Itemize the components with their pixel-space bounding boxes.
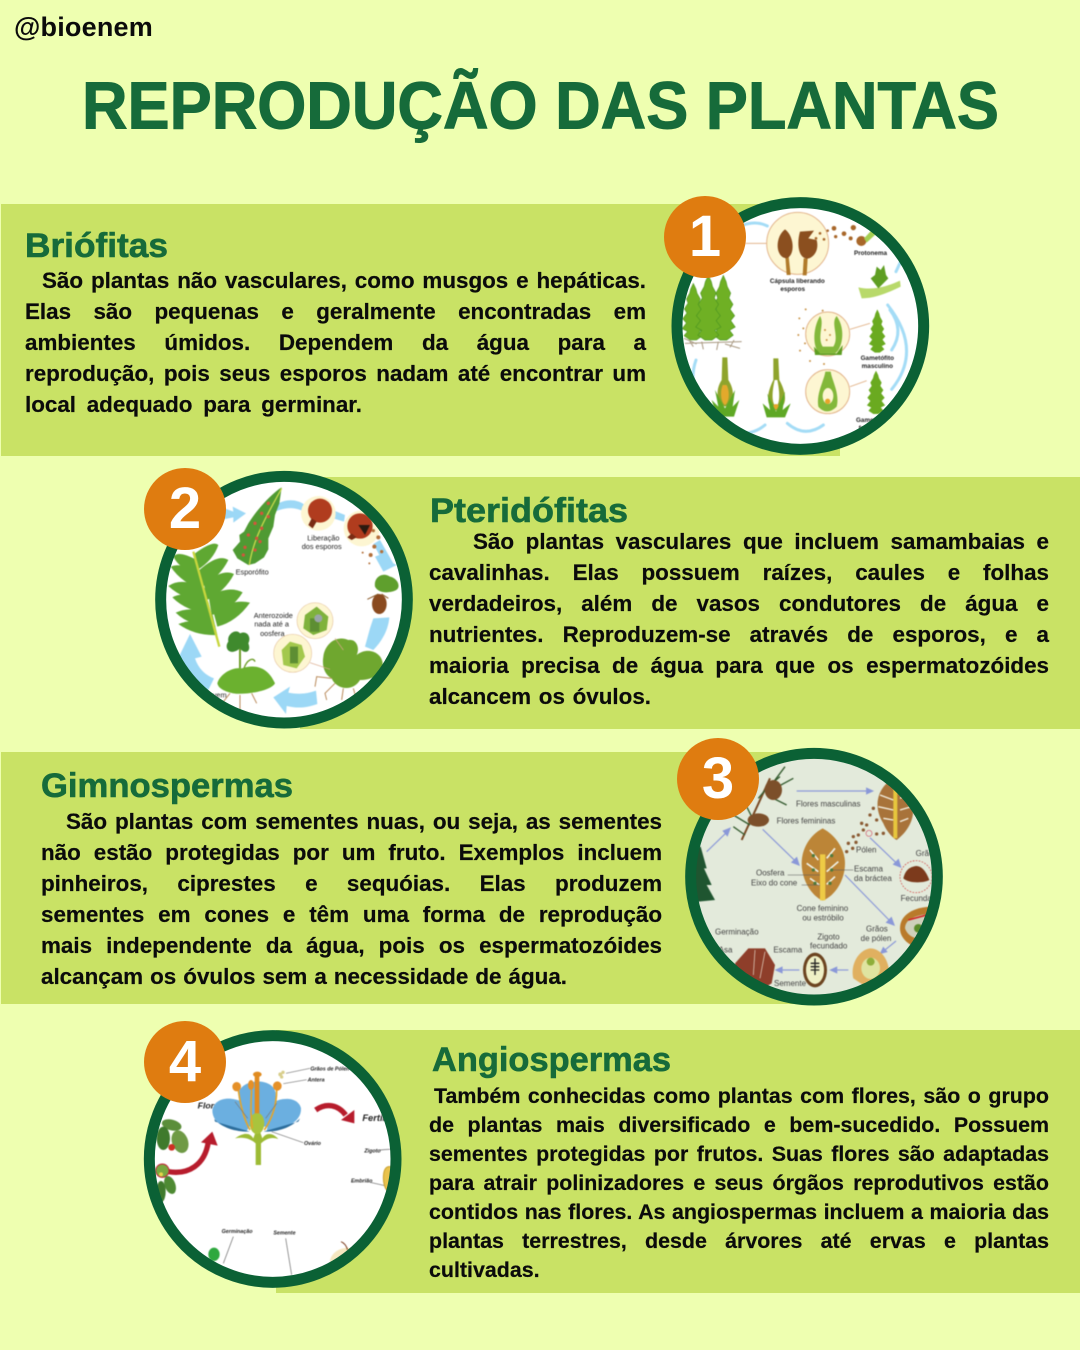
ring [149,1036,396,1282]
label: Liberação dos esporos: dos esporos [302,542,342,551]
text block: Angiospermas: plantas terrestres, desde árvores até ervas e plantas [429,1229,1049,1253]
diagram labels: Grãos [866,925,888,934]
illustration: fern life cycle circle [155,470,413,728]
text block: Angiospermas: sementes protegidas por frutos. Suas flores são adaptadas [429,1142,1049,1166]
diagram labels: Cone feminino [797,904,849,913]
diagram labels [715,800,945,988]
diagram labels: Semente [774,979,807,988]
badge: 4 [144,1021,226,1103]
diagram labels: da bráctea [854,874,892,883]
text block: Pteridófitas: verdadeiros, além de vasos condutores de água e [429,591,1049,616]
flower [212,1068,310,1165]
ring [161,476,407,723]
labels: flower parts: Germinação [222,1229,253,1235]
panel: Gimnospermas [1,752,801,1004]
badge: 1: 1 [689,204,721,269]
red arrow to flower [168,1132,218,1172]
arrows: blue cycle [177,500,397,714]
heading: Gimnospermas: Gimnospermas [41,767,293,805]
text block: Pteridófitas: cavalinhas. Elas possuem raízes, caules e folhas [429,560,1049,585]
text block: Gimnospermas: sementes em cones e têm uma forma de reprodução [41,902,662,927]
label: Gametófito masculino: Gametófito [861,355,894,362]
label: Gametófito masculino [861,355,894,370]
badge: 3 [677,738,759,820]
diagram labels: Grão [916,849,934,858]
red arrow to fertilisation [316,1106,354,1123]
heading: Angiospermas: Angiospermas [432,1041,671,1079]
embryo seed [383,1167,398,1192]
female gametophyte plant [867,371,885,414]
winged seed [735,948,775,988]
fertilization detail [900,861,933,949]
text block: Angiospermas: Também conhecidas como plantas com flores, são o grupo [434,1084,1049,1108]
labels: flower parts: Grãos de Pólen [310,1066,350,1072]
label: Anterozoide nada até a oosfera: nada até a [254,620,290,629]
diagram labels: Escama [773,945,803,954]
moss plant with roots [682,275,742,350]
label: Liberação dos esporos [302,533,342,551]
female gametophyte detail [806,370,867,414]
arrows: water cycle [693,223,907,433]
sporophytes on moss [712,357,791,417]
text block: Briófitas: local adequado para germinar. [25,392,362,417]
diagram labels: Oosfera [756,869,785,878]
seedling and pointer lines [208,1149,393,1275]
pollen dots [845,807,885,853]
labels: flower parts: Antera [307,1078,325,1084]
text block: Gimnospermas: não estão protegidas por um fruto. Exemplos incluem [41,840,662,865]
label: Jovem esporófito (partial): Jovem [205,690,227,699]
fruit [330,1242,378,1282]
ring [677,203,924,449]
text block: Pteridófitas: São plantas vasculares que incluem samambaias e [473,529,1049,554]
ring [691,753,937,1000]
heading: Briófitas: Briófitas [25,227,168,265]
heading: Pteridófitas: Pteridófitas [430,492,628,530]
handle: @bioenem: @bioenem [14,12,153,42]
capsule releasing spores [745,212,877,275]
label: Anterozoide nada até a oosfera: Anterozoide [254,611,293,620]
text block: Angiospermas: de plantas mais diversificado e bem-sucedido. Possuem [429,1113,1049,1137]
blue process arrows [707,788,901,973]
text block: Pteridófitas: nutrientes. Reproduzem-se através de esporos, e a [429,622,1049,647]
diagram labels: fecundado [810,941,848,950]
text block: Gimnospermas: pinheiros, ciprestes e sequóias. Elas produzem [41,871,662,896]
male gametophyte detail [797,308,870,365]
spore capsules [301,496,383,564]
label: Gametófito masculino: masculino [862,363,893,370]
label: Gametófito feminino [856,416,875,428]
text block: Angiospermas: para atrair polinizadores e seus órgãos reprodutivos estão [429,1171,1049,1195]
illustration: moss life cycle circle [672,197,930,455]
label: Liberação dos esporos: Liberação [307,533,339,542]
panel: Angiospermas [276,1030,1080,1293]
label: Fertilização: Fertilização [362,1113,414,1123]
label: Cápsula liberando esporos: esporos [780,286,805,293]
badge: 2 [144,468,226,550]
text block: Briófitas [25,268,646,417]
text block: Briófitas: reprodução, pois seus esporos nadam até encontrar um [25,361,646,386]
gametophyte [310,638,383,700]
label: Anterozoide nada até a oosfera: oosfera [260,629,285,638]
diagram labels: Flores masculinas [796,800,860,809]
text block: Angiospermas: contidos nas flores. As angiospermas incluem a maioria das [429,1200,1049,1224]
illustration: angiosperm life cycle circle [144,1030,402,1288]
labels: flower parts: Embrião [351,1178,373,1184]
panel: Pteridófitas [300,477,1080,729]
fertile frond with sori [233,487,282,565]
text block: Gimnospermas: mais independente da água, pois os espermatozóides [41,933,662,958]
text block: Gimnospermas [41,809,662,989]
diagram labels: Fecundação [901,894,945,903]
diagram labels: de pólen [861,934,891,943]
germinating spore [367,575,399,614]
text block: Gimnospermas: São plantas com sementes nuas, ou seja, as sementes [66,809,662,834]
badge: 4: 4 [169,1029,201,1094]
diagram labels: Zigoto [817,933,840,942]
pine tree [696,846,716,902]
label: Anterozoide nada até a oosfera [254,611,293,638]
text block: Pteridófitas: alcancem os óvulos. [429,684,651,709]
diagram labels: Pólen [856,845,876,854]
illustration: gymnosperm life cycle circle [685,748,943,1006]
badge: 2: 2 [169,476,201,541]
label: Gametófito feminino: feminino [859,425,885,432]
label: Cápsula liberando esporos: Cápsula liberando [770,278,825,285]
diagram labels: Asa [719,946,733,955]
protonema sprout [858,265,901,298]
labels: flower parts [222,1066,381,1236]
text block: Pteridófitas [429,529,1050,709]
large fern frond [168,544,250,647]
diagram labels: Flores femininas [777,817,835,826]
text block: Pteridófitas: maioria precisa de água para que os espermatozóides [429,653,1049,678]
pollen grain and ovule [852,948,890,984]
label: Esporófito: Esporófito [236,567,269,576]
diagram labels: Escama [854,865,883,874]
diagram labels: Germinação [715,928,759,937]
text block: Briófitas: ambientes úmidos. Dependem da água para a [25,330,646,355]
leaves and fruit [156,1117,192,1202]
text block: Briófitas: Elas são pequenas e geralmente encontradas em [25,299,646,324]
male cone [878,777,913,840]
title: REPRODUÇÃO DAS PLANTAS [82,68,999,144]
label: Protonema: Protonema [854,250,888,257]
text block: Gimnospermas: alcançam os óvulos sem a necessidade de água. [41,964,567,989]
text block: Briófitas: São plantas não vasculares, como musgos e hepáticas. [42,268,646,293]
archegonium detail circles [274,603,333,672]
diagram labels: ou estróbilo [802,913,844,922]
young fern on gametophyte [217,631,275,710]
badge: 1 [664,196,746,278]
labels: flower parts: Ovário [304,1141,322,1147]
label: Gametófito feminino: Gametófito [856,417,890,424]
diagram labels: Eixo do cone [751,879,798,888]
text block: Angiospermas: cultivadas. [429,1258,540,1282]
label: Flor: Flor [198,1100,215,1110]
pine branch with cones [733,767,793,840]
labels: flower parts: Zigoto [363,1148,381,1154]
male gametophyte plant [869,309,886,353]
panel: Briófitas [1,204,840,456]
text block: Angiospermas [429,1084,1049,1282]
label: Cápsula liberando esporos [770,278,825,293]
labels: flower parts: Semente [273,1230,296,1236]
female cone [788,828,853,901]
badge: 3: 3 [702,746,734,811]
fertilised zygote seed [803,953,827,987]
